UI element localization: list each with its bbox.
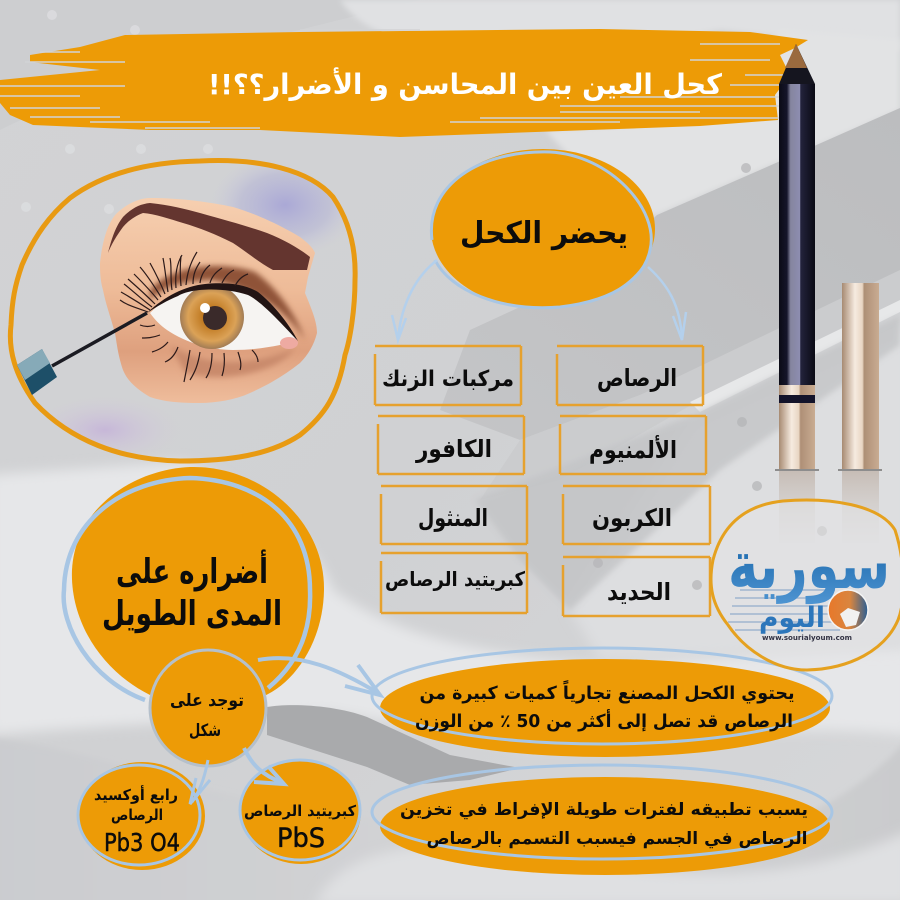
- form bubble: [150, 650, 266, 766]
- box: zinc compounds: [375, 346, 521, 405]
- panel: logo: [711, 500, 900, 670]
- bubble: PbS: [240, 760, 361, 864]
- pencil illustration: [775, 44, 819, 543]
- skin: [100, 198, 317, 403]
- logo globe: [828, 590, 868, 630]
- eye socket shade: [150, 266, 305, 340]
- upper lid line: [147, 283, 298, 341]
- panel: kohl ingredients: [375, 149, 710, 616]
- box: lead: [557, 346, 703, 405]
- bubble: Pb3O4: Pb3 O4: [104, 828, 180, 857]
- form bubble: شكل: [189, 721, 221, 741]
- bubble: PbS: PbS: [277, 823, 325, 854]
- box: carbon: [563, 486, 710, 544]
- box: aluminium: [560, 416, 706, 474]
- tear duct: [280, 337, 298, 349]
- heading bubble: [431, 149, 655, 309]
- bubble: Pb3O4: رابع أوكسيد: [94, 785, 178, 804]
- box: iron: الحديد: [607, 578, 671, 606]
- callout: accumulation: [372, 765, 832, 875]
- applicator: [52, 313, 147, 366]
- panel: eye illustration: [10, 153, 360, 464]
- right light area behind logo: [570, 320, 900, 660]
- logo url: www.sourialyoum.com: [762, 634, 852, 642]
- title banner brush: [0, 29, 808, 137]
- large bubble: المدى الطويل: [102, 594, 282, 634]
- arrow: right: [648, 267, 686, 340]
- title text: كحل العين بين المحاسن و الأضرار؟؟!!: [208, 67, 723, 101]
- box: lead sulfide: كبريتيد الرصاص: [385, 567, 525, 591]
- callout: lead content: يحتوي الكحل المصنع تجارياً كميات كبيرة من: [420, 680, 794, 704]
- arrow: to Pb3O4: [190, 760, 210, 804]
- box: lead sulfide: [381, 553, 527, 613]
- box: menthol: [381, 486, 527, 544]
- arrow: to PbS: [244, 748, 284, 784]
- panel: logo: اليوم: [759, 601, 825, 634]
- heading bubble: يحضر الكحل: [460, 216, 628, 251]
- logo stripes: [728, 590, 840, 630]
- box: iron: [563, 557, 710, 616]
- callout: accumulation: يسبب تطبيقه لفترات طويلة الإفراط في تخزين: [400, 800, 808, 820]
- arrow to first callout: [258, 658, 380, 695]
- box: menthol: المنثول: [418, 504, 488, 532]
- panel: long-term harm: [64, 467, 832, 875]
- lower left light sweep: [0, 462, 900, 745]
- box: camphor: [378, 416, 524, 474]
- box: zinc compounds: مركبات الزنك: [382, 367, 514, 392]
- gray diagonal brush band: [440, 108, 900, 440]
- pencil cap: [838, 283, 882, 543]
- gray shadow stroke: [267, 705, 520, 785]
- eye white: [150, 290, 297, 350]
- large bubble: أضراره على: [116, 549, 268, 592]
- callout: lead content: [372, 648, 832, 757]
- form bubble: توجد على: [170, 691, 244, 711]
- bubble: Pb3O4: الرصاص: [111, 806, 163, 824]
- arrow: left: [392, 260, 437, 340]
- bubble: Pb3O4: [78, 762, 205, 870]
- box: aluminium: الألمنيوم: [589, 435, 677, 464]
- bubble: PbS: كبريتيد الرصاص: [244, 802, 356, 820]
- callout: accumulation: الرصاص في الجسم فيسبب التسمم بالرصاص: [426, 829, 808, 849]
- iris: [180, 285, 244, 349]
- eyelashes: [120, 252, 258, 382]
- large bubble: [64, 467, 324, 700]
- box: camphor: الكافور: [415, 435, 492, 463]
- box: carbon: الكربون: [592, 504, 672, 532]
- callout: lead content: الرصاص قد تصل إلى أكثر من 50 ٪ من الوزن: [415, 709, 793, 732]
- box: lead: الرصاص: [597, 364, 677, 392]
- eyebrow: [108, 203, 310, 270]
